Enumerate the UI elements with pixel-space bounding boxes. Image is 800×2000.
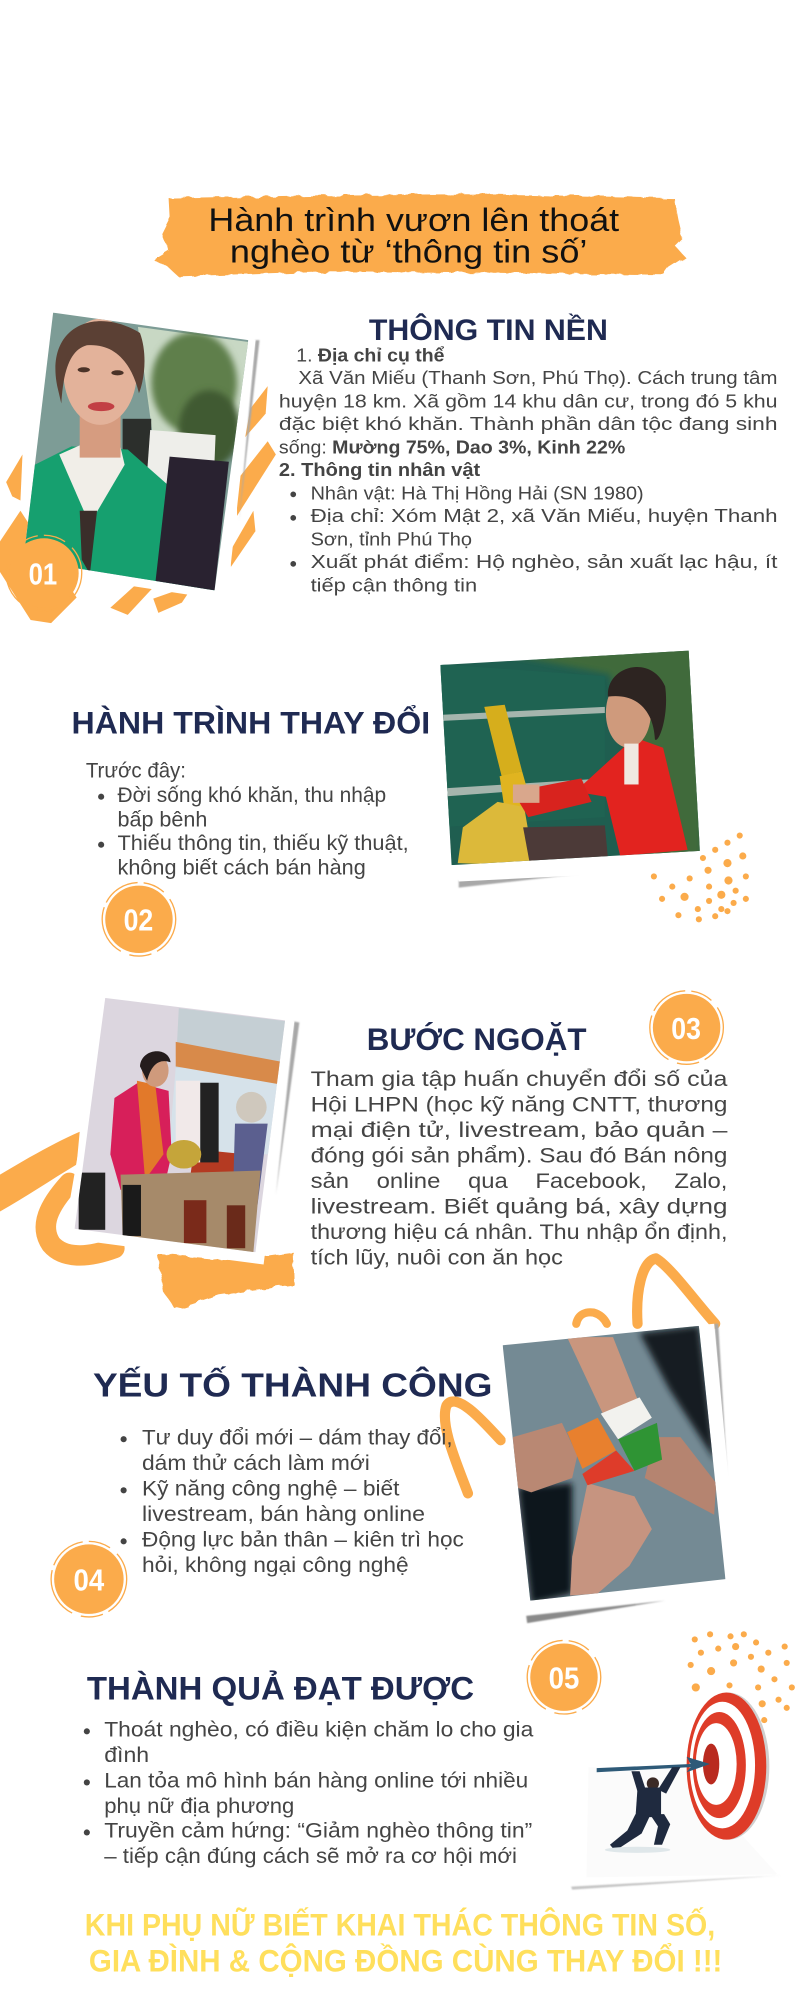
closing slogan [85, 1907, 722, 1978]
number badge 05: 05 [549, 1661, 579, 1695]
section 5 body text: Lan tỏa mô hình bán hàng online tới nhiều [104, 1770, 528, 1793]
section 2 body text: Thiếu thông tin, thiếu kỹ thuật, [117, 832, 409, 855]
section 5 body text: Truyền cảm hứng: “Giảm nghèo thông tin” [104, 1820, 532, 1843]
section 2 body text: không biết cách bán hàng [117, 856, 366, 879]
photo 4: hands with puzzle [496, 1323, 739, 1623]
section 3 body text: mại điện tử, livestream, bảo quản – [311, 1119, 728, 1142]
photo 1: woman with phone [20, 306, 260, 603]
section 5 body text [84, 1718, 534, 1868]
icon: red target [687, 1693, 769, 1840]
closing slogan: GIA ĐÌNH & CỘNG ĐỒNG CÙNG THAY ĐỔI !!! [89, 1942, 722, 1978]
number badge 01 [6, 535, 82, 611]
section 3 body text: thương hiệu cá nhân. Thu nhập ổn định, [311, 1221, 727, 1244]
section 4 body text: livestream, bán hàng online [142, 1503, 425, 1526]
orange dots cluster top [651, 832, 749, 922]
number badge 04: 04 [74, 1563, 104, 1597]
section 3 body text [311, 1068, 728, 1270]
title banner: Hành trình vươn lên thoát [208, 201, 619, 238]
section 2 body text: bấp bênh [117, 808, 207, 831]
section 4 body text: Động lực bản thân – kiên trì học [142, 1528, 464, 1551]
section 2 body text: Đời sống khó khăn, thu nhập [117, 784, 386, 807]
section 3 body text: Tham gia tập huấn chuyển đổi số của [311, 1068, 728, 1091]
section 1 body text: huyện 18 km. Xã gồm 14 khu dân cư, trong đó 5 khu [279, 392, 778, 413]
section 1 body text: 2. Thông tin nhân vật [279, 460, 481, 481]
section 3 body text: Hội LHPN (học kỹ năng CNTT, thương [311, 1093, 727, 1116]
section 1 body text: đặc biệt khó khăn. Thành phần dân tộc đang sinh [279, 414, 778, 435]
section 3 body text: sản online qua Facebook, Zalo, [311, 1170, 727, 1193]
section 5 heading: THÀNH QUẢ ĐẠT ĐƯỢC [87, 1670, 474, 1707]
section 3 heading: BƯỚC NGOẶT [367, 1021, 586, 1057]
section 1 body text: Xã Văn Miếu (Thanh Sơn, Phú Thọ). Cách trung tâm [298, 368, 778, 389]
number badge 03 [650, 991, 723, 1064]
section 1 body text: 1. Địa chỉ cụ thể [296, 346, 445, 367]
title banner [153, 194, 686, 277]
section 1 body text [279, 346, 778, 596]
section 3 body text: tích lũy, nuôi con ăn học [311, 1247, 563, 1270]
closing slogan: KHI PHỤ NỮ BIẾT KHAI THÁC THÔNG TIN SỐ, [85, 1907, 715, 1943]
section 4 body text: Kỹ năng công nghệ – biết [142, 1477, 400, 1500]
number badge 02: 02 [124, 904, 153, 938]
title banner: nghèo từ ‘thông tin số’ [230, 233, 587, 270]
section 4 body text [121, 1426, 464, 1577]
section 3 body text: livestream. Biết quảng bá, xây dựng [311, 1195, 727, 1218]
number badge 05 [527, 1640, 601, 1714]
photo 2: woman packing goods [431, 644, 702, 888]
number badge 04 [51, 1541, 127, 1617]
number badge 01: 01 [29, 557, 57, 591]
section 4 brush strokes [445, 1258, 715, 1493]
section 5 body text: đình [104, 1744, 149, 1767]
section 3 body text: đóng gói sản phẩm). Sau đó Bán nông [311, 1144, 727, 1167]
orange dots cluster bottom [688, 1631, 795, 1732]
section 1 body text: Địa chỉ: Xóm Mật 2, xã Văn Miếu, huyện Thanh [311, 506, 778, 527]
section 1 body text: tiếp cận thông tin [311, 575, 477, 596]
number badge 03: 03 [671, 1012, 701, 1046]
section 2 body text [86, 759, 409, 879]
section 3 brush strokes [0, 1132, 294, 1309]
section 1 body text: sống: Mường 75%, Dao 3%, Kinh 22% [279, 438, 626, 459]
number badge 02 [102, 883, 176, 956]
section 1 body text: Sơn, tỉnh Phú Thọ [311, 529, 472, 550]
section 2 body text: Trước đây: [86, 759, 186, 782]
section 5 body text: Thoát nghèo, có điều kiện chăm lo cho gia [104, 1718, 534, 1741]
section 5 body text: – tiếp cận đúng cách sẽ mở ra cơ hội mới [104, 1845, 517, 1868]
section 2 heading: HÀNH TRÌNH THAY ĐỔI [72, 704, 430, 740]
target illustration panel [571, 1693, 782, 1890]
section 4 body text: Tư duy đổi mới – dám thay đổi, [142, 1426, 453, 1449]
section 1 body text: Nhân vật: Hà Thị Hồng Hải (SN 1980) [311, 483, 644, 504]
section 4 body text: dám thử cách làm mới [142, 1452, 370, 1475]
section 4 heading: YẾU TỐ THÀNH CÔNG [93, 1365, 492, 1404]
section 4 body text: hỏi, không ngại công nghệ [142, 1554, 409, 1577]
photo 3: market stall [63, 996, 299, 1265]
section 5 body text: phụ nữ địa phương [104, 1795, 294, 1818]
section 1 decorative brush strokes [0, 386, 276, 623]
section 1 heading: THÔNG TIN NỀN [369, 313, 608, 347]
icon: man pushing arrow [597, 1757, 710, 1853]
section 1 body text: Xuất phát điểm: Hộ nghèo, sản xuất lạc hậu, ít [311, 552, 778, 573]
